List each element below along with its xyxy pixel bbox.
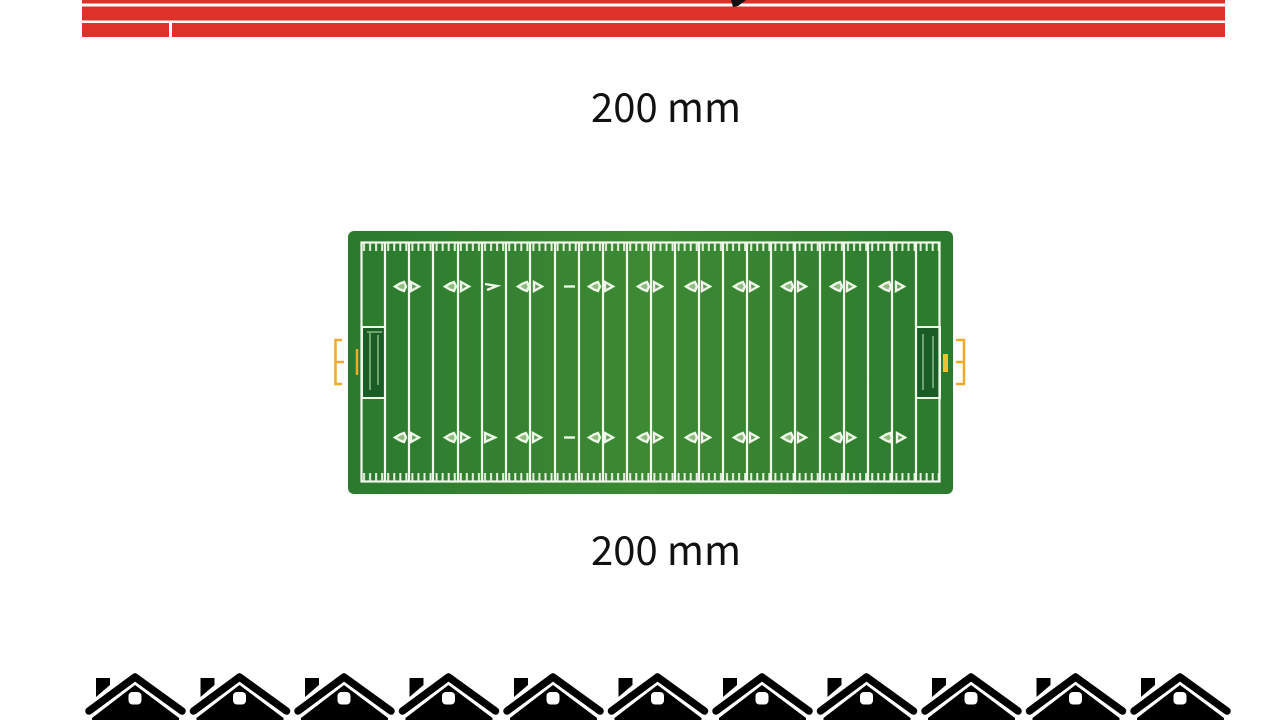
dimension label: bottom 200 mm: 200 mm (591, 519, 741, 577)
yard lines (362, 242, 940, 482)
yard numbers: upper row (395, 282, 904, 291)
track: red running lanes (82, 0, 1225, 37)
row of house icons (89, 677, 1227, 720)
yard numbers: lower row (395, 433, 905, 442)
hash marks (361, 243, 940, 481)
end zones (362, 327, 940, 398)
football field (336, 231, 964, 494)
goal post: left (336, 340, 357, 384)
goal post: right (943, 340, 964, 384)
field turf (348, 231, 953, 494)
dimension label: top 200 mm: 200 mm (591, 76, 741, 134)
